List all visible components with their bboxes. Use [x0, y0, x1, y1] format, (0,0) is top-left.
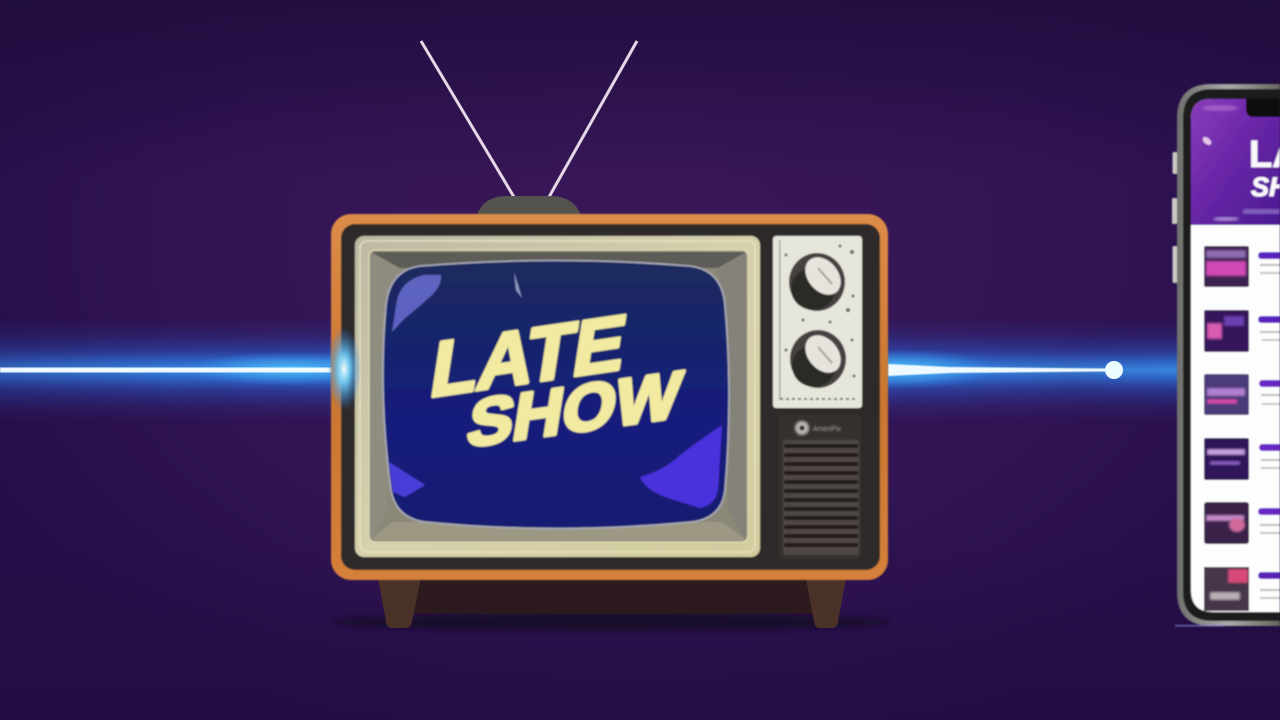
screen title [425, 299, 687, 462]
screen title: SHOW [463, 358, 687, 462]
tv cabinet [331, 214, 888, 580]
phone list row 2 [1204, 310, 1280, 352]
control panel [773, 236, 862, 408]
phone list row 1 [1204, 246, 1280, 287]
phone side buttons [1172, 152, 1178, 283]
light flare on tv edge [327, 327, 361, 411]
knob 2 [790, 328, 848, 388]
light beam: right with end dot [887, 324, 1178, 416]
tv bezel [355, 236, 760, 557]
tv stand [378, 578, 846, 628]
floor shadow [334, 613, 890, 631]
brand logo [795, 421, 842, 435]
tv screen [383, 260, 729, 528]
knob 1 [789, 250, 848, 311]
screen reflections [392, 275, 441, 332]
phone list row 3 [1204, 374, 1280, 415]
antenna [421, 41, 637, 215]
phone list row 5 [1204, 502, 1280, 544]
phone header [1191, 99, 1280, 225]
phone body [1177, 84, 1280, 626]
phone reflection line [1175, 625, 1225, 626]
light beam: left [0, 324, 332, 416]
speaker panel [779, 414, 861, 559]
phone screen [1191, 99, 1280, 613]
beam end dot [1105, 361, 1123, 379]
phone list row 6 [1204, 567, 1280, 611]
phone list row 4 [1204, 438, 1280, 480]
brand logo: AmeriPix [813, 426, 842, 433]
phone [1172, 84, 1280, 626]
speaker grille [783, 440, 859, 555]
screen title: LATE [425, 299, 632, 414]
phone notch [1246, 98, 1280, 117]
